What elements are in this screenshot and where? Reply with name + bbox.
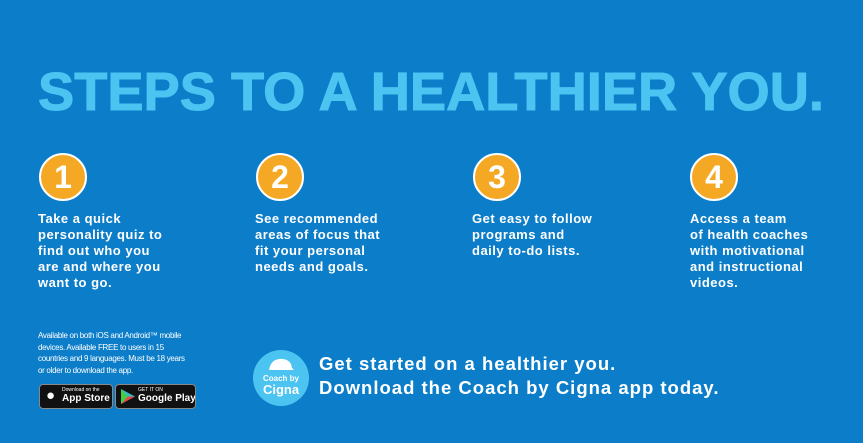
step 4 text: Access a team [690, 211, 787, 226]
step 2 number: 2 [271, 159, 289, 195]
step 2 text: See recommended [255, 211, 378, 226]
badge: app store [39, 384, 113, 409]
step 1 text: Take a quick [38, 211, 121, 226]
step 1 text: personality quiz to [38, 227, 162, 242]
step 4 text: with motivational [690, 243, 805, 258]
step 2 number [256, 153, 304, 201]
call to action: Download the Coach by Cigna app today. [319, 377, 719, 398]
step 4 text: and instructional [690, 259, 803, 274]
step 4 text: of health coaches [690, 227, 808, 242]
call to action: Get started on a healthier you. [319, 353, 616, 374]
step 3 number: 3 [488, 159, 506, 195]
step 4 number [690, 153, 738, 201]
step 2 text: areas of focus that [255, 227, 380, 242]
badge: google play: Google Play [138, 393, 196, 404]
step 3 text [472, 211, 592, 258]
step 2 text: fit your personal [255, 243, 365, 258]
step 3 text: Get easy to follow [472, 211, 592, 226]
call to action [319, 353, 719, 398]
logo: coach by cigna [253, 350, 309, 406]
step 1 number [39, 153, 87, 201]
availability note: Available on both iOS and Android™ mobile devices. Available FREE to users in 15 countries and 9 languages. Must be 18 years or older to download the app. [38, 331, 185, 374]
step 2 text [255, 211, 380, 274]
step 1 text: find out who you [38, 243, 150, 258]
step 3 text: daily to-do lists. [472, 243, 580, 258]
step 4 text: videos. [690, 275, 738, 290]
logo: coach by cigna: Coach by [263, 374, 299, 383]
badge: app store: Download on the [62, 387, 100, 393]
step 2 text: needs and goals. [255, 259, 368, 274]
badge: google play [115, 384, 196, 409]
badge: app store: ● [46, 387, 55, 404]
step 1 text: are and where you [38, 259, 161, 274]
step 3 text: programs and [472, 227, 565, 242]
step 3 number [473, 153, 521, 201]
step 4 text [690, 211, 808, 290]
logo: coach by cigna: Cigna [263, 382, 299, 397]
badge: google play: GET IT ON [138, 387, 163, 393]
step 1 text [38, 211, 162, 290]
badge: app store: App Store [62, 393, 110, 404]
step 4 number: 4 [705, 159, 723, 195]
step 1 text: want to go. [38, 275, 112, 290]
step 1 number: 1 [54, 159, 72, 195]
